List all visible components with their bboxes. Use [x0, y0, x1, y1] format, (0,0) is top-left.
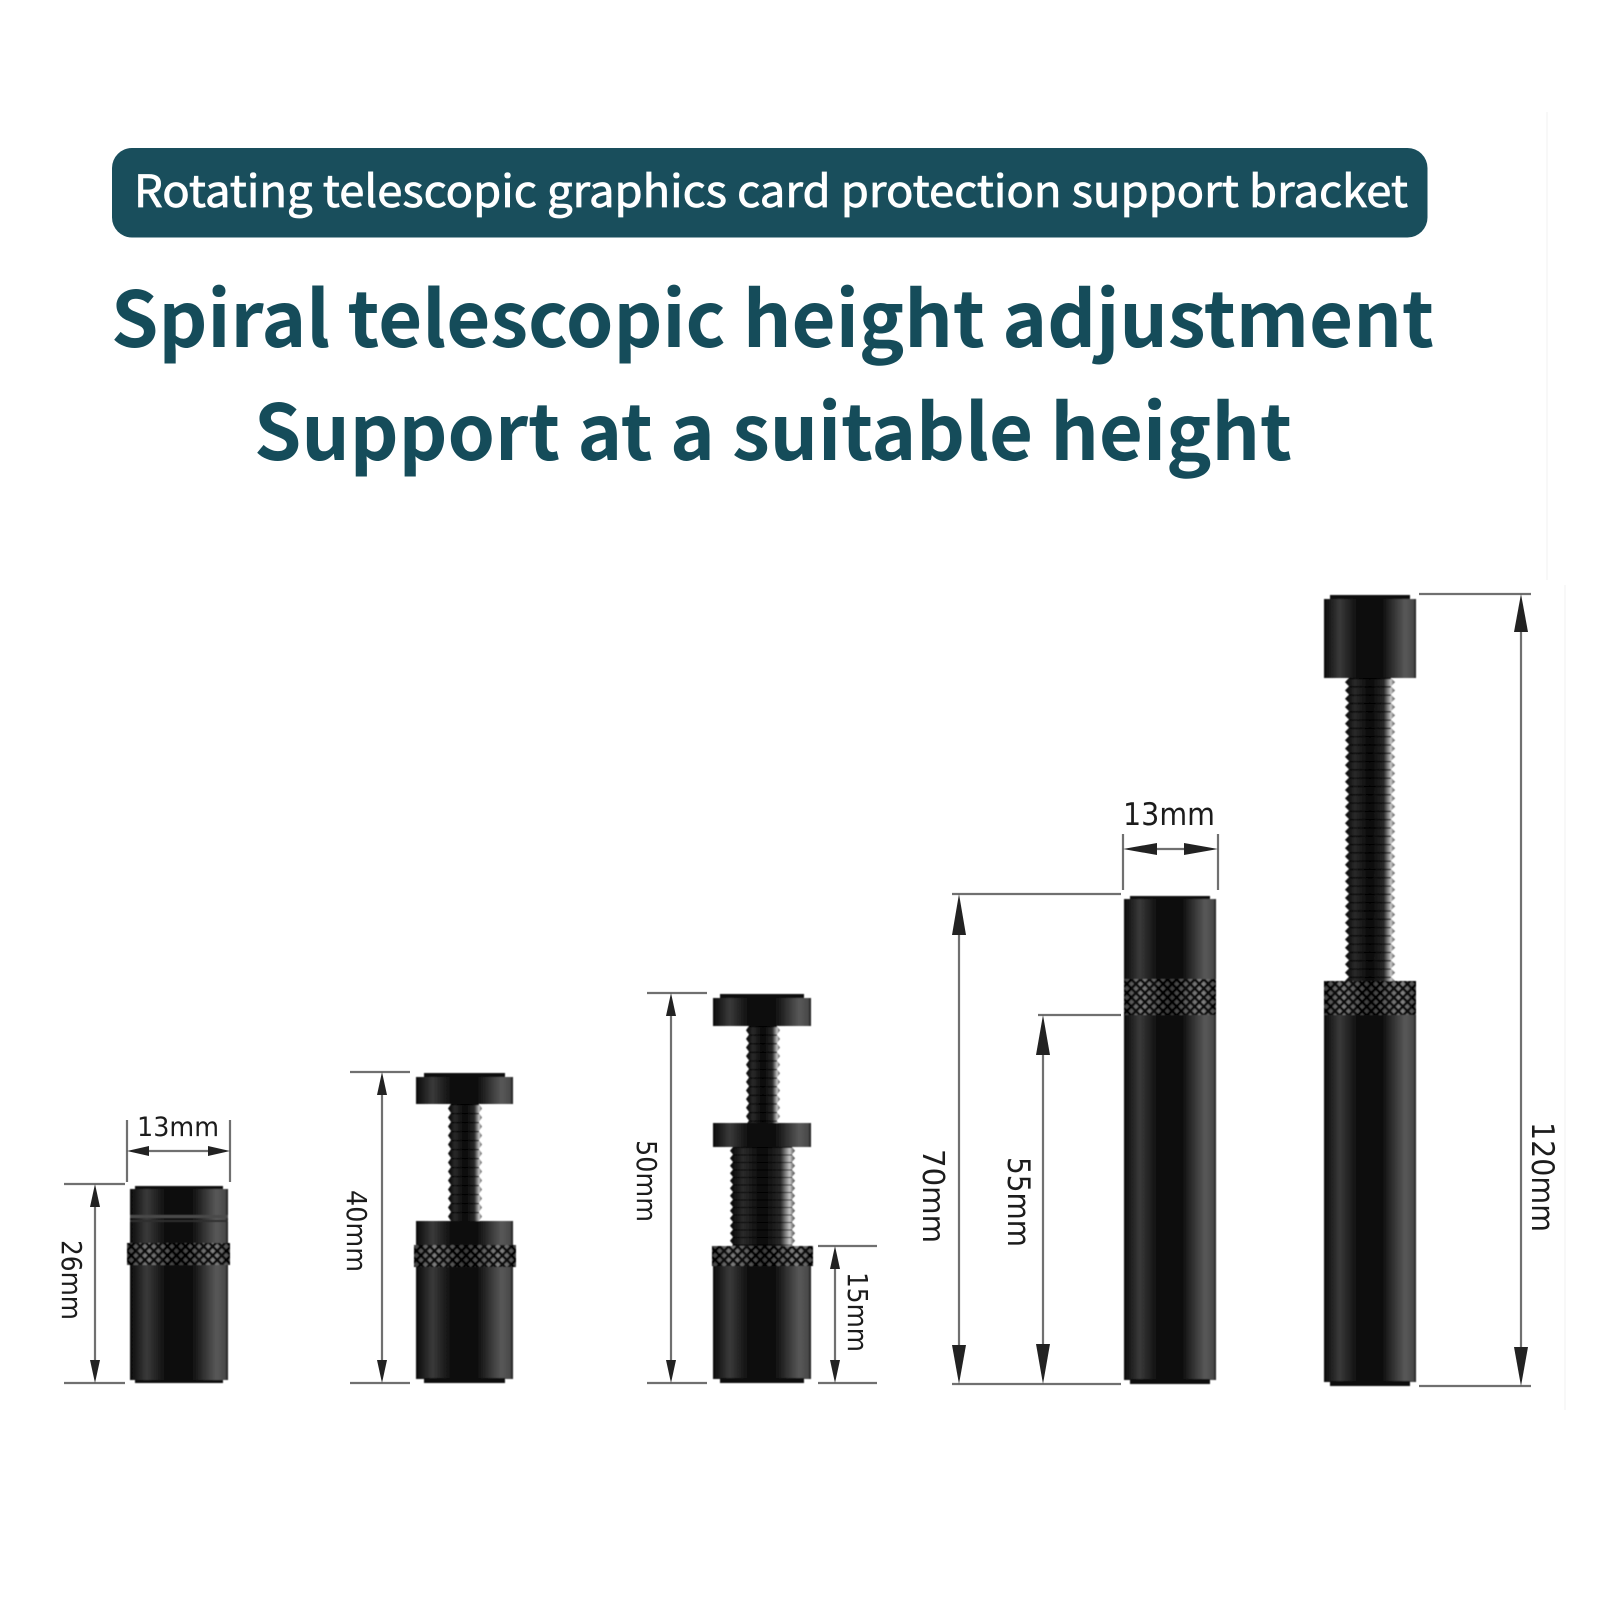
bracket 3: 50mm two stage: [630, 993, 877, 1383]
bracket 2: 40mm one stage: [340, 1072, 516, 1383]
bracket 3 base height dimension: 15mm: [841, 1272, 874, 1352]
bracket 1 height dimension: [55, 1184, 125, 1383]
bracket 1 height dimension: 26mm: [55, 1240, 88, 1320]
bracket 5 body: [1324, 595, 1416, 1386]
bracket 4 width dimension: 13mm: [1123, 797, 1215, 833]
bracket 1 width dimension: [127, 1112, 230, 1182]
bracket 4 width dimension: [1123, 797, 1218, 890]
bracket 4 collapsed height dimension: [1000, 1015, 1121, 1384]
bracket 2 height dimension: [340, 1072, 410, 1383]
bracket 3 total height dimension: 50mm: [630, 1140, 663, 1222]
bracket 4: 70mm closed long: [915, 797, 1218, 1384]
bracket 1: 26mm closed: [55, 1112, 230, 1383]
bracket 4 total height dimension: [915, 894, 1121, 1384]
bracket 4 collapsed height dimension: 55mm: [1000, 1157, 1036, 1247]
bracket 3 base height dimension: [818, 1246, 877, 1383]
bracket 3 body: [712, 994, 813, 1383]
title line 2: Support at a suitable height: [254, 372, 1292, 483]
bracket 2 height dimension: 40mm: [340, 1190, 373, 1272]
bracket 1 body: [127, 1186, 230, 1383]
bracket 5 height dimension: 120mm: [1524, 1122, 1560, 1232]
title line 1: Spiral telescopic height adjustment: [111, 259, 1434, 370]
bracket 5 height dimension: [1419, 594, 1560, 1386]
bracket 4 total height dimension: 70mm: [915, 1149, 950, 1243]
bracket 2 body: [414, 1073, 516, 1383]
heading banner: Rotating telescopic graphics card protection support bracket: [134, 156, 1408, 220]
bracket 1 width dimension: 13mm: [137, 1112, 219, 1143]
bracket 4 body: [1124, 896, 1216, 1384]
bracket 3 total height dimension: [630, 993, 707, 1383]
bracket 5: 120mm extended: [1324, 594, 1560, 1386]
heading banner: [112, 148, 1428, 238]
